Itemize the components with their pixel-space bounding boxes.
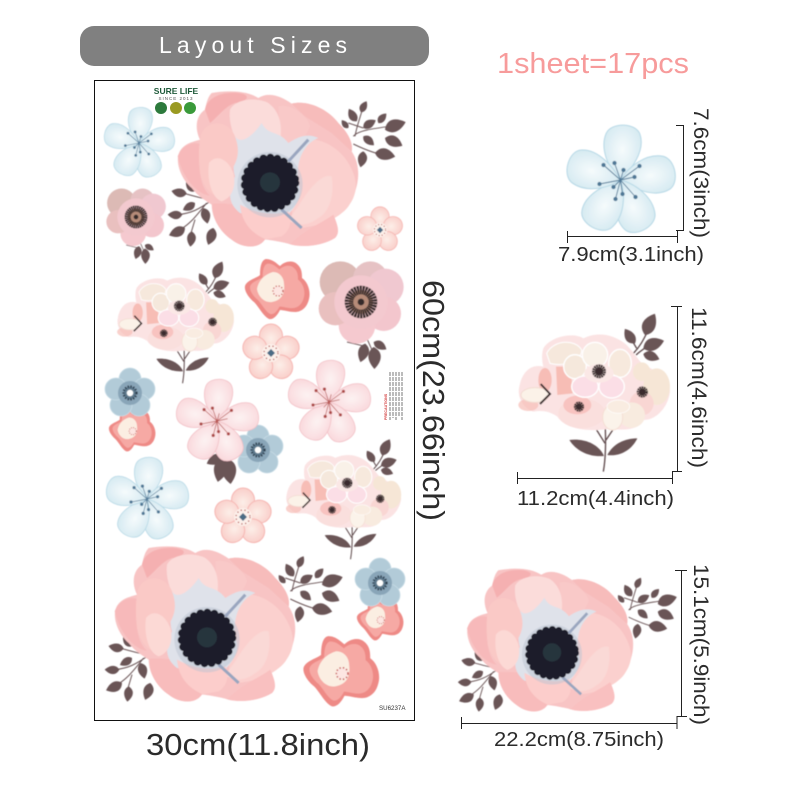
width dimension line	[568, 230, 678, 243]
large anemone bottom	[104, 546, 345, 702]
layout sizes heading bar: Layout Sizes	[159, 32, 347, 58]
brand logo	[154, 86, 199, 114]
blue small flower with leaves	[205, 425, 283, 485]
width label: 11.2cm(4.4inch)	[517, 488, 674, 510]
sheet height label: 60cm(23.66inch)	[416, 280, 451, 521]
icon: anemone	[457, 569, 679, 712]
product code: SU6237A	[379, 705, 406, 712]
blue flower size diagram	[558, 108, 712, 266]
large poppy	[319, 261, 404, 369]
brand logo: SURE LIFE	[154, 86, 199, 96]
width dimension line	[518, 472, 672, 484]
blue flower lower	[103, 457, 191, 543]
brand logo: SINCE 2013	[158, 96, 194, 101]
small blossom right	[355, 207, 405, 254]
width label: 7.9cm(3.1inch)	[558, 244, 704, 266]
blue small flower left	[105, 368, 155, 416]
warning text: PRECAUTIONS	[384, 393, 388, 420]
pink five petal flower left	[173, 379, 261, 465]
pink five petal flower right	[285, 360, 373, 446]
icon: blue flower	[563, 124, 678, 238]
blue flower top	[101, 107, 176, 181]
layout sizes heading bar	[80, 26, 429, 66]
height label: 15.1cm(5.9inch)	[689, 564, 712, 725]
sheet border	[94, 80, 414, 720]
width dimension line	[462, 716, 677, 729]
sheet width label: 30cm(11.8inch)	[146, 727, 370, 762]
height label: 7.6cm(3inch)	[689, 108, 712, 238]
warning text	[384, 372, 402, 420]
panel: full sticker sheet	[94, 80, 414, 720]
anemone size diagram	[457, 564, 712, 751]
sheet flower artwork	[101, 91, 408, 706]
small coral right	[357, 597, 403, 640]
bouquet lower	[286, 437, 401, 559]
height dimension line	[675, 570, 687, 716]
height dimension line	[676, 126, 684, 230]
sheet count heading: 1sheet=17pcs	[497, 48, 689, 80]
blue small flower right	[355, 558, 405, 606]
coral flower upper	[245, 259, 310, 319]
bouquet size diagram	[517, 306, 710, 510]
height dimension line	[671, 306, 682, 472]
blossom middle	[240, 324, 302, 383]
icon: bouquet	[518, 311, 670, 472]
small coral left	[109, 408, 155, 451]
coral flower bottom	[303, 636, 379, 706]
blossom lower	[212, 488, 274, 547]
bouquet upper	[117, 259, 234, 383]
small poppy	[106, 189, 166, 264]
large anemone top	[167, 91, 408, 247]
width label: 22.2cm(8.75inch)	[494, 729, 664, 751]
height label: 11.6cm(4.6inch)	[687, 307, 710, 468]
